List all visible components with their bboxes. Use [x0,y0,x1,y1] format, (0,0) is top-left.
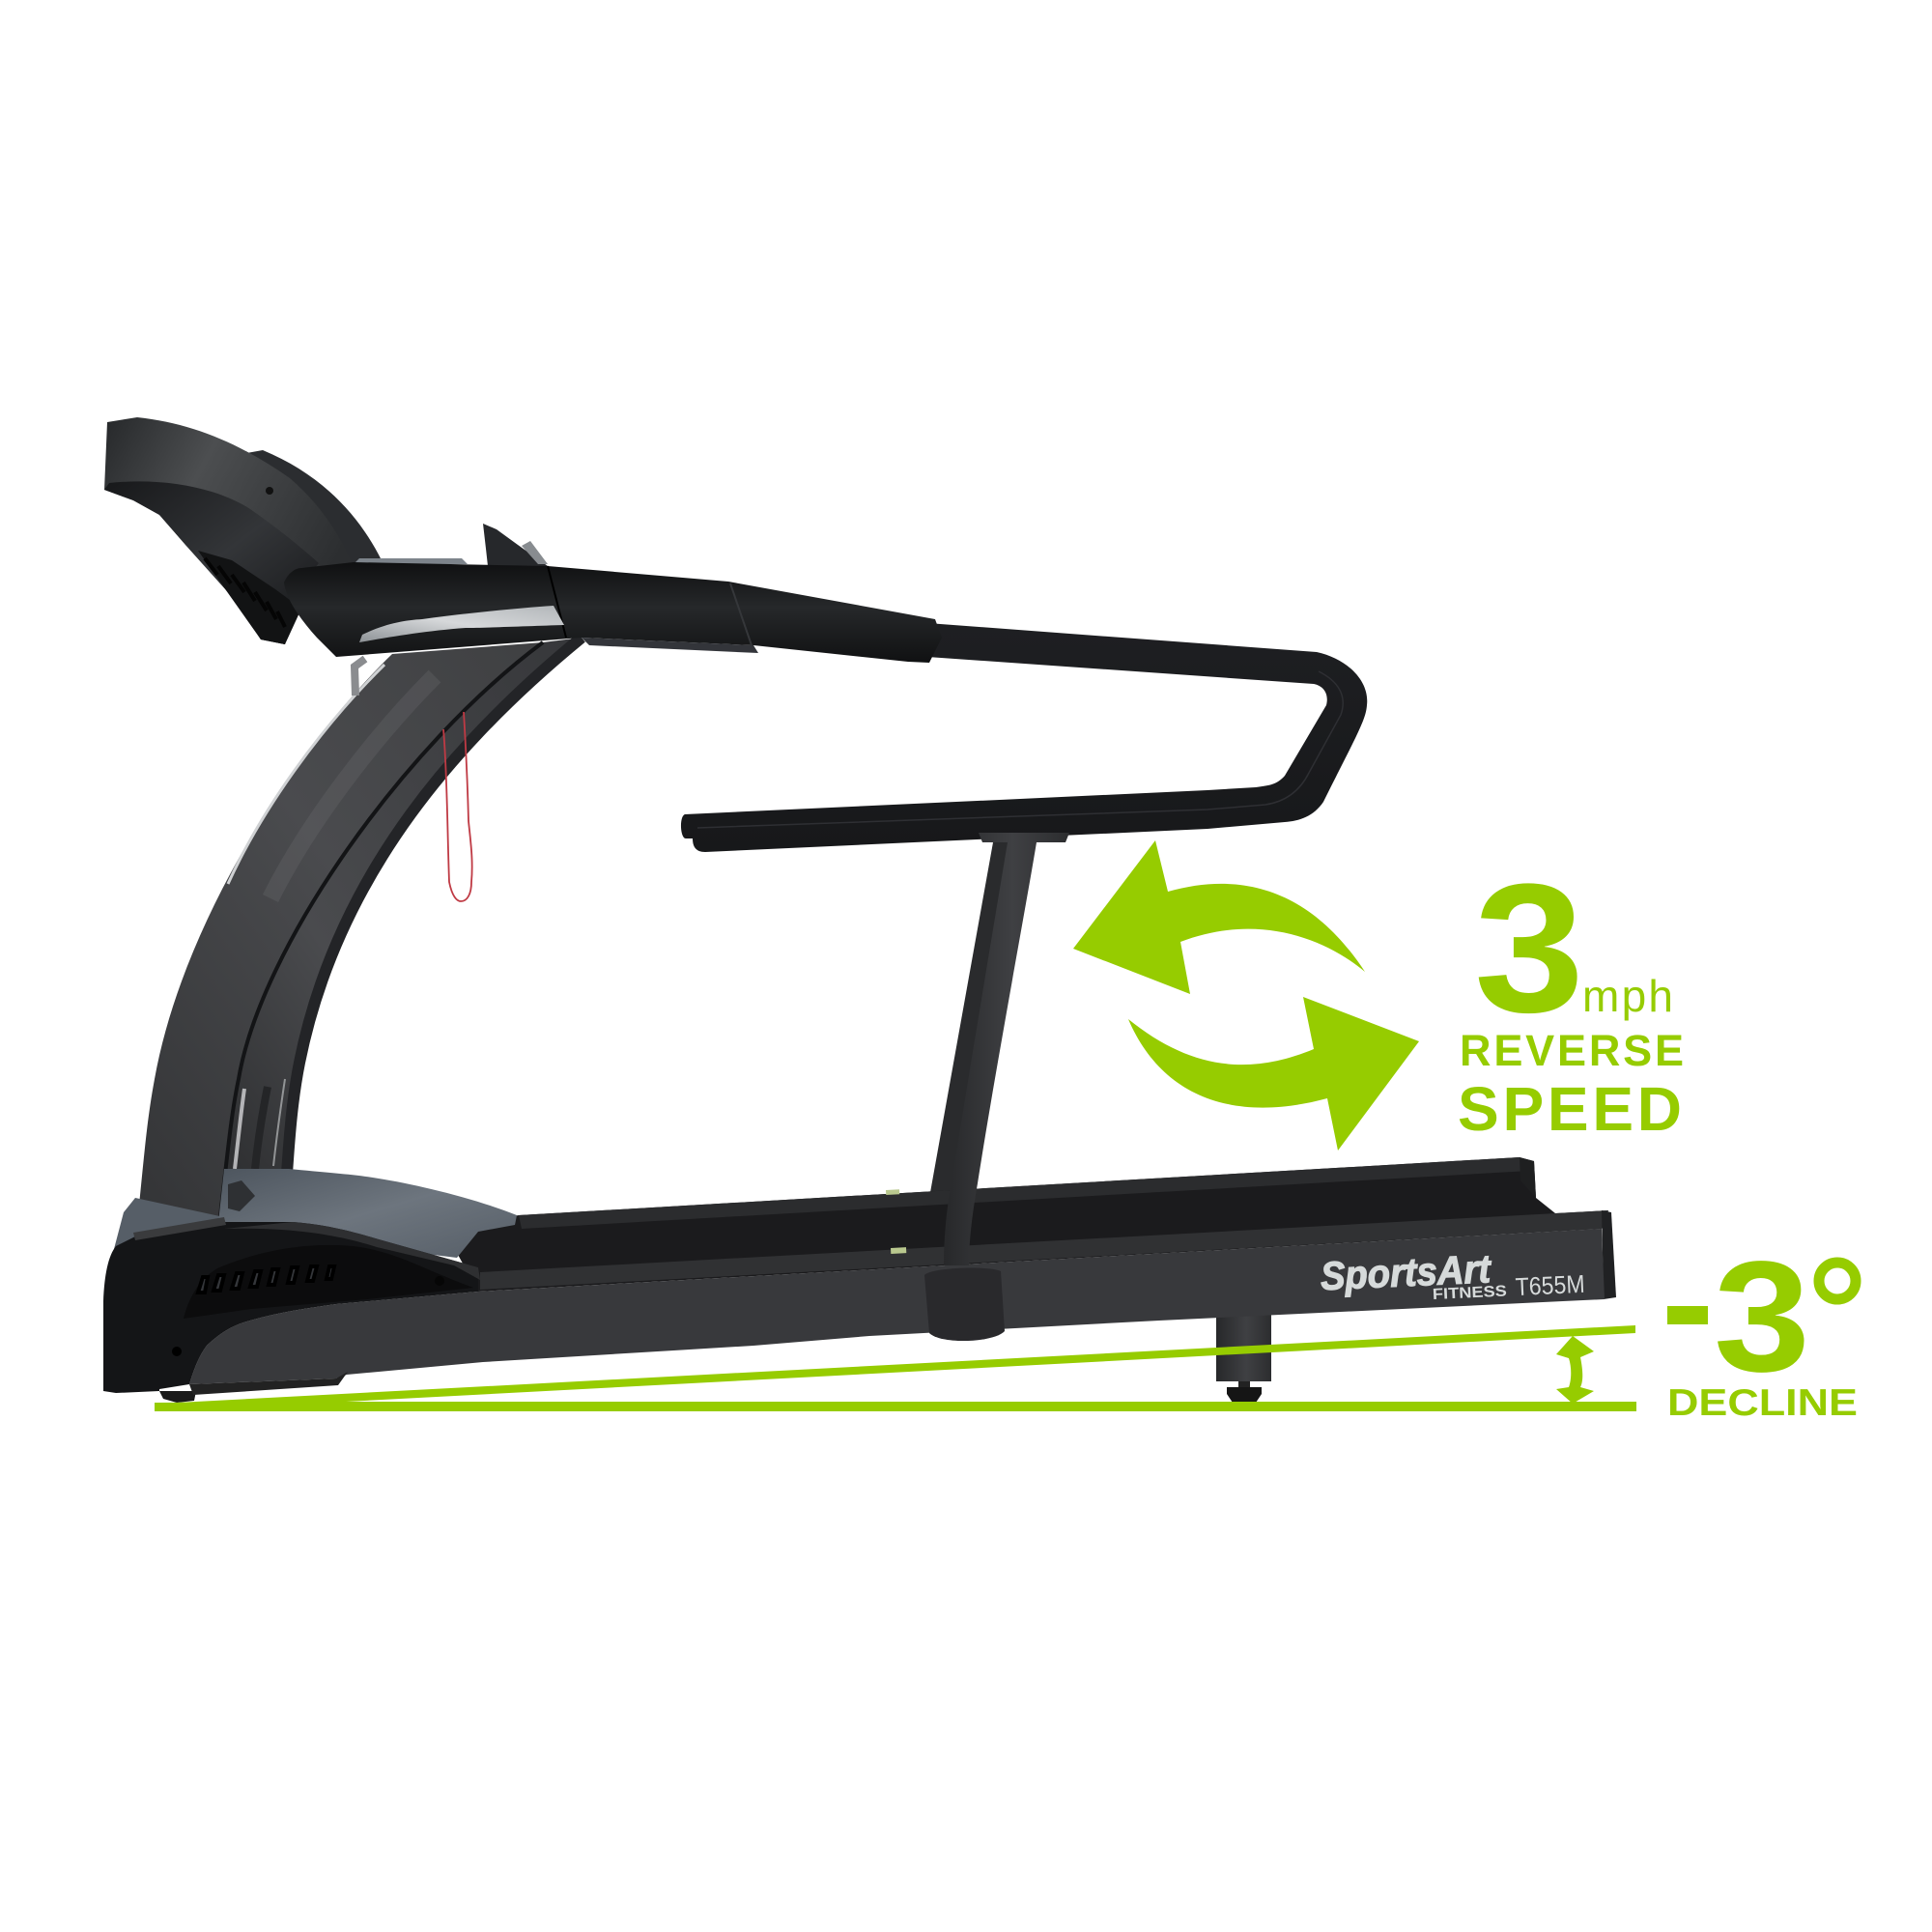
icon: double-headed angle arrow [1556,1336,1594,1404]
speed label: SPEED [1458,1074,1682,1144]
handlebar rail loop [681,623,1367,852]
brand logo: SportsArt [1320,1246,1493,1298]
decline angle lines [155,1325,1636,1411]
rear upright arch back piece [225,638,582,1174]
icon: reverse arrows [1073,840,1419,1151]
icon: arrow pointing right [1128,997,1419,1151]
arch base collar [133,1217,226,1240]
top tray and grip controls [354,524,548,566]
support post rear leg [929,842,1024,1198]
decline callout [1667,1228,1858,1424]
red safety cord [443,712,472,901]
icon: arrow pointing left [1073,840,1365,994]
brand logo: T655M [1515,1269,1585,1301]
decline label: DECLINE [1667,1382,1858,1424]
minus three degrees: 3 [1714,1228,1810,1405]
brand logo: FITNESS [1433,1283,1508,1303]
reverse label: REVERSE [1460,1026,1684,1075]
handlebar block [284,562,942,663]
black base housing [103,1222,480,1403]
reverse speed callout [1458,846,1684,1144]
brand logo [1320,1242,1585,1310]
display console [104,417,382,644]
speed number: 3 [1474,846,1584,1051]
deck belt and rails [457,1157,1616,1299]
side rail support post [924,833,1069,1341]
front motor hood [114,1169,517,1258]
speed unit: mph [1582,971,1673,1021]
silver handlebar accent [359,606,564,642]
treadmill [103,417,1616,1403]
support foot [1216,1314,1271,1403]
rear upright arch front panel [137,642,543,1225]
deck side panel [189,1229,1605,1384]
minus three degrees [1667,1228,1856,1405]
